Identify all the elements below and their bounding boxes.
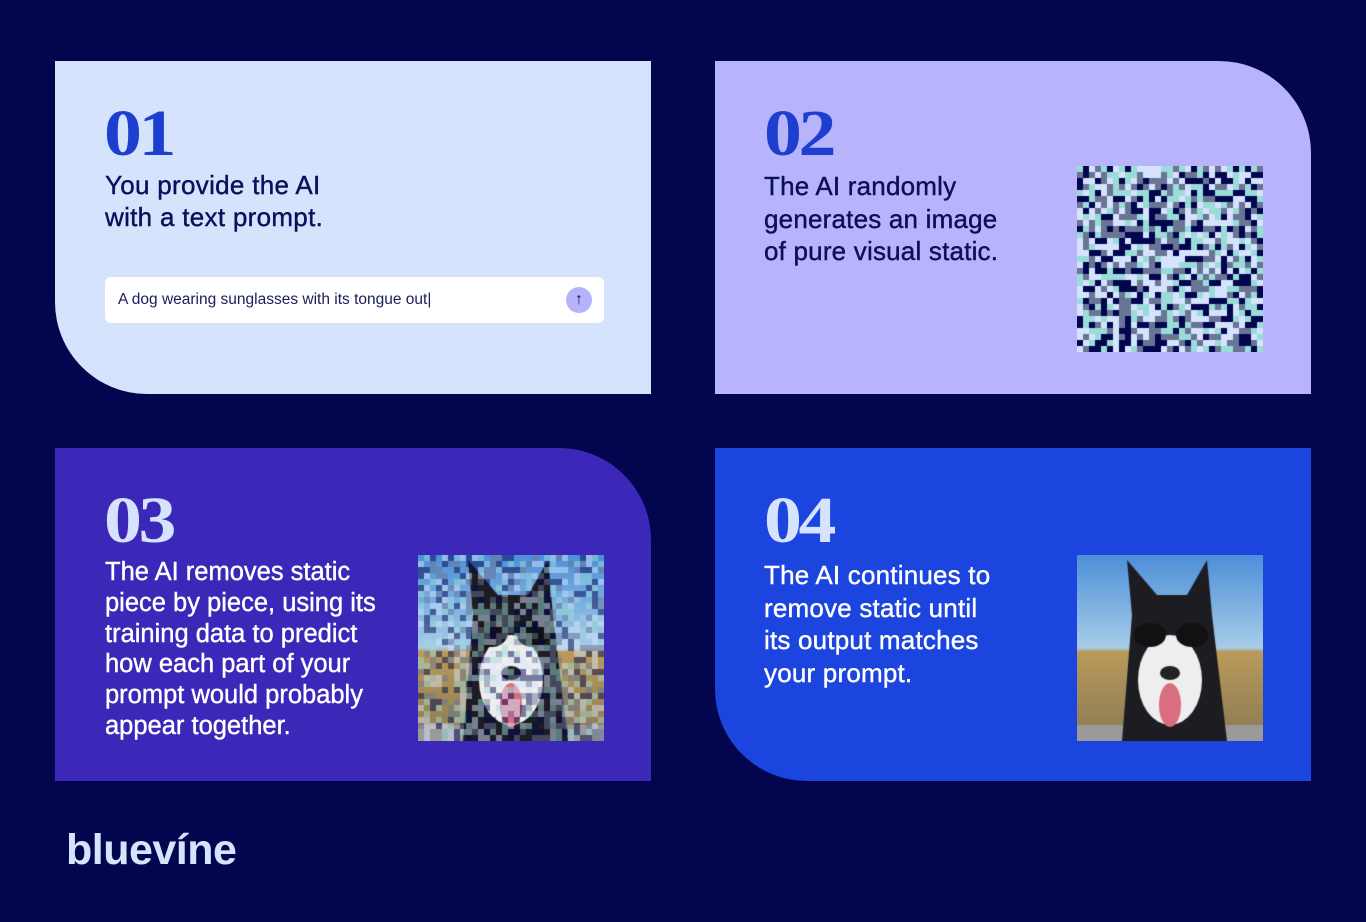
panel: step 4 (715, 448, 1311, 781)
text: step 1: with a text prompt. (105, 202, 323, 232)
text: step 3: prompt would probably (105, 681, 363, 709)
text: step 1: You provide the AI (105, 170, 320, 200)
panel: step 2 (715, 61, 1311, 394)
prompt input box (105, 277, 604, 323)
text: step 2: generates an image (764, 204, 997, 234)
number 03: 03 (104, 484, 173, 557)
text: step 3: The AI removes static (105, 558, 350, 586)
text: step 3: how each part of your (105, 650, 350, 678)
image: partially denoised dog (418, 555, 604, 741)
icon: send arrow (566, 287, 592, 313)
text: step 4: remove static until (764, 592, 977, 622)
image: dog with sunglasses (1077, 555, 1263, 741)
text: step 3: training data to predict (105, 620, 357, 648)
text: step 4 (764, 560, 990, 688)
text: step 2 (764, 171, 998, 266)
text: step 3 (105, 558, 376, 740)
text: step 3: appear together. (105, 712, 291, 740)
text: step 2: The AI randomly (764, 171, 956, 201)
panel: step 3 (55, 448, 651, 781)
icon: send arrow: ↑ (575, 291, 583, 308)
number 01: 01 (104, 97, 173, 170)
text: step 4: its output matches (764, 625, 979, 655)
panel: step 1 (55, 61, 651, 394)
image: visual static (1077, 166, 1263, 352)
text: step 2: of pure visual static. (764, 236, 998, 266)
text: step 1 (104, 170, 323, 232)
number 02: 02 (764, 97, 833, 170)
text: step 4: The AI continues to (764, 560, 990, 590)
text: step 3: piece by piece, using its (105, 589, 376, 617)
text: step 4: your prompt. (764, 658, 912, 688)
logo: bluevine: bluevíne (66, 826, 236, 874)
prompt text: A dog wearing sunglasses with its tongue out| (118, 291, 431, 308)
number 04: 04 (764, 484, 833, 557)
